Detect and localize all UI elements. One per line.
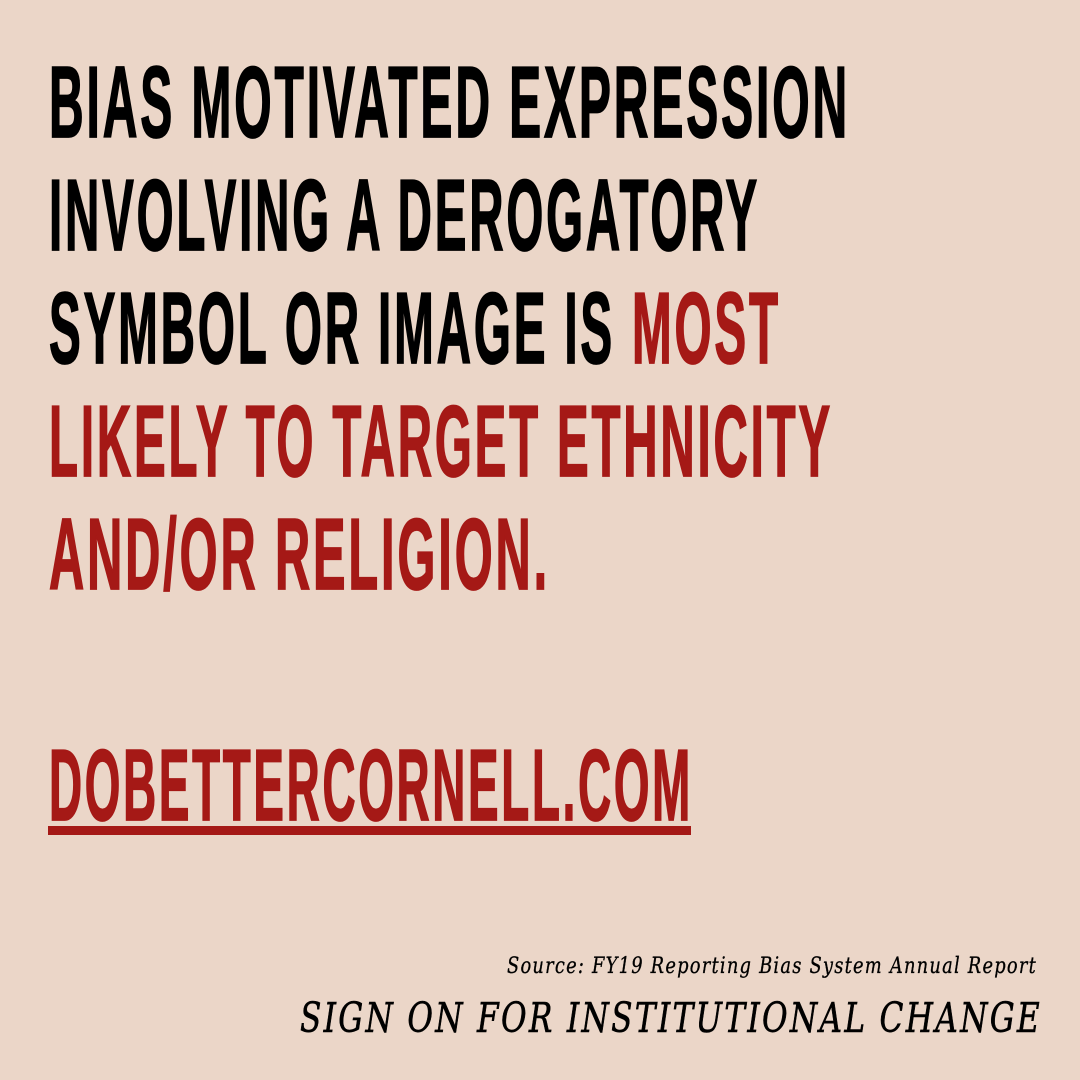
headline: AND/OR RELIGION. xyxy=(49,499,550,611)
website link xyxy=(48,730,693,842)
headline: MOST xyxy=(632,273,781,385)
headline xyxy=(49,47,850,611)
